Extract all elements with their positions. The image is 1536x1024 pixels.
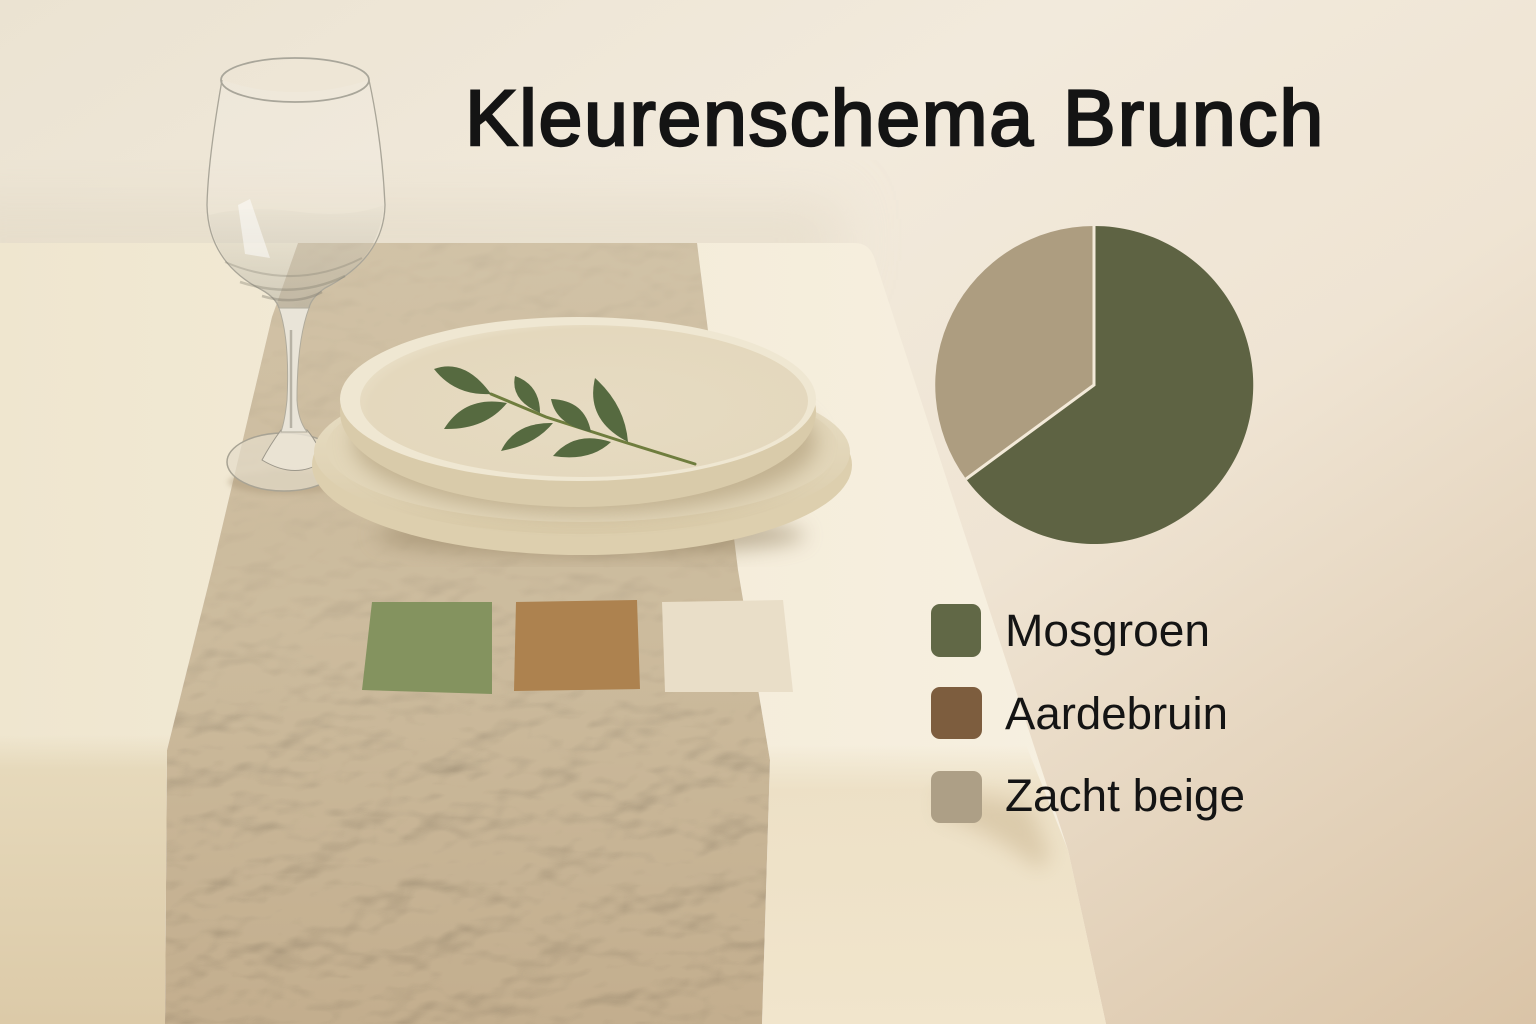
legend: Zacht beige: Zacht beige [1005,770,1245,821]
glass stem [279,308,309,432]
slice: soft beige [935,226,1094,479]
legend: Aardebruin: Aardebruin [1005,688,1228,739]
upper plate [340,317,816,507]
tablecloth [0,243,1106,1024]
glass shadow [228,470,348,494]
glass bowl [207,80,385,308]
wine glass [207,58,385,494]
leaf 3 [514,376,540,413]
glass reflection [209,205,384,308]
leaf 6 [593,378,628,442]
olive sprig [434,366,695,464]
place swatches [362,600,793,694]
upper plate shadow [353,370,817,514]
tablecloth front drop left [0,735,175,1024]
swatch: cream [662,600,793,692]
tablecloth fold shadow [940,790,1050,870]
pie chart [935,226,1253,544]
sprig stem [491,394,695,464]
glass bowl sides [207,80,385,308]
leaf 4 [551,399,591,432]
leaf 2 [444,401,507,429]
glass foot [227,433,341,491]
stacked plates [312,317,852,555]
title: Brunch [1063,73,1325,162]
leaf 5 [501,423,553,451]
glass rim [221,58,369,102]
tablecloth front drop right [760,745,1106,1024]
legend [931,604,1245,823]
lower plate [312,375,852,555]
plate shadow [375,515,805,555]
swatch: brown [514,600,640,691]
leaf 7 [553,438,611,457]
table runner [165,243,770,1024]
swatch: green [362,602,492,694]
leaf 1 [434,366,491,394]
slice: moss green [966,226,1253,544]
title: Kleurenschema [465,73,1035,162]
legend: Mosgroen: Mosgroen [1005,605,1210,656]
legend: Mosgroen [931,604,1210,657]
